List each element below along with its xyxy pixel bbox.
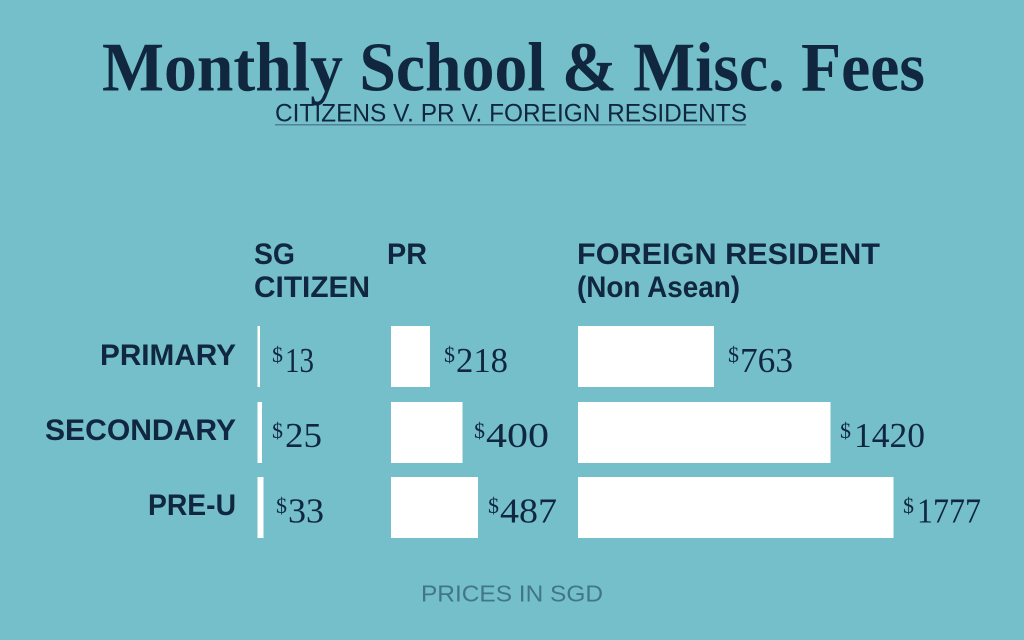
bar chart: foreign resident — [578, 326, 981, 538]
column heading: SG citizen: SG — [254, 238, 295, 271]
bar: PR primary — [391, 326, 430, 387]
value: PR secondary: 400 — [486, 416, 549, 455]
bar: PR secondary — [391, 402, 462, 463]
value: citizen pre-u: 33 — [288, 492, 324, 530]
value: PR pre-u: 487 — [500, 492, 557, 530]
bar: foreign pre-u — [578, 477, 894, 538]
column heading: foreign resident: (Non Asean) — [577, 271, 740, 304]
value: foreign secondary: 1420 — [854, 416, 925, 455]
value: foreign pre-u: 1777 — [917, 492, 981, 530]
value: foreign primary: $ — [728, 342, 739, 367]
title: Monthly School & Misc. Fees — [102, 30, 925, 106]
footnote: PRICES IN SGD — [421, 580, 603, 606]
value: citizen secondary: $ — [272, 418, 283, 443]
value: PR secondary: $ — [474, 418, 485, 443]
bar: citizen secondary — [258, 402, 262, 463]
bar chart: PR — [391, 326, 557, 538]
column heading: foreign resident: FOREIGN RESIDENT — [577, 238, 880, 271]
bar: foreign primary — [578, 326, 714, 387]
value: foreign primary: 763 — [740, 341, 793, 380]
value: foreign pre-u: $ — [903, 493, 914, 518]
value: citizen pre-u: $ — [276, 493, 287, 518]
value: citizen primary — [272, 341, 314, 380]
bar chart: SG citizen — [258, 326, 324, 538]
column heading: PR: PR — [387, 238, 427, 271]
row label: primary: PRIMARY — [100, 339, 236, 372]
value: PR pre-u: $ — [488, 493, 499, 518]
value: citizen primary: $ — [272, 342, 283, 367]
row label: secondary: SECONDARY — [45, 414, 236, 447]
subtitle: CITIZENS V. PR V. FOREIGN RESIDENTS — [275, 100, 747, 128]
row label: pre-u: PRE-U — [148, 489, 236, 522]
bar: PR pre-u — [391, 477, 478, 538]
column heading: foreign resident — [577, 238, 880, 304]
bar: citizen pre-u — [258, 477, 264, 538]
column heading: SG citizen — [254, 238, 370, 304]
bar: foreign secondary — [578, 402, 830, 463]
value: PR primary: 218 — [456, 341, 508, 380]
value: citizen primary: 13 — [285, 341, 314, 380]
value: foreign secondary: $ — [840, 418, 851, 443]
column heading: SG citizen: CITIZEN — [254, 271, 370, 304]
bar: citizen primary — [258, 326, 260, 387]
value: citizen secondary: 25 — [285, 416, 322, 455]
value: PR primary: $ — [444, 342, 455, 367]
